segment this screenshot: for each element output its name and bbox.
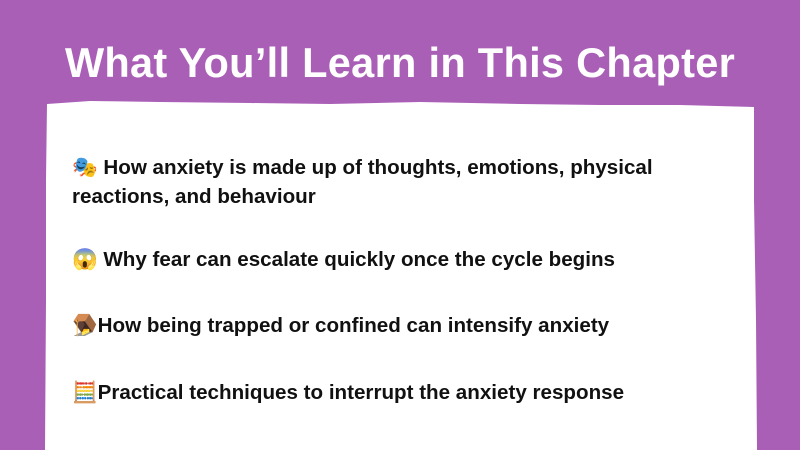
text: item 1: 🎭 How anxiety is made up of thoughts, emotions, physical <box>72 156 653 179</box>
text: item 2: 😱 Why fear can escalate quickly once the cycle begins <box>72 248 615 271</box>
text: item 1 <box>72 156 653 208</box>
text: item 1: reactions, and behaviour <box>72 185 316 208</box>
text: item 3: 🪤How being trapped or confined can intensify anxiety <box>72 314 609 337</box>
title: What You’ll Learn in This Chapter <box>65 39 735 86</box>
text: item 4: 🧮Practical techniques to interrupt the anxiety response <box>72 381 624 404</box>
